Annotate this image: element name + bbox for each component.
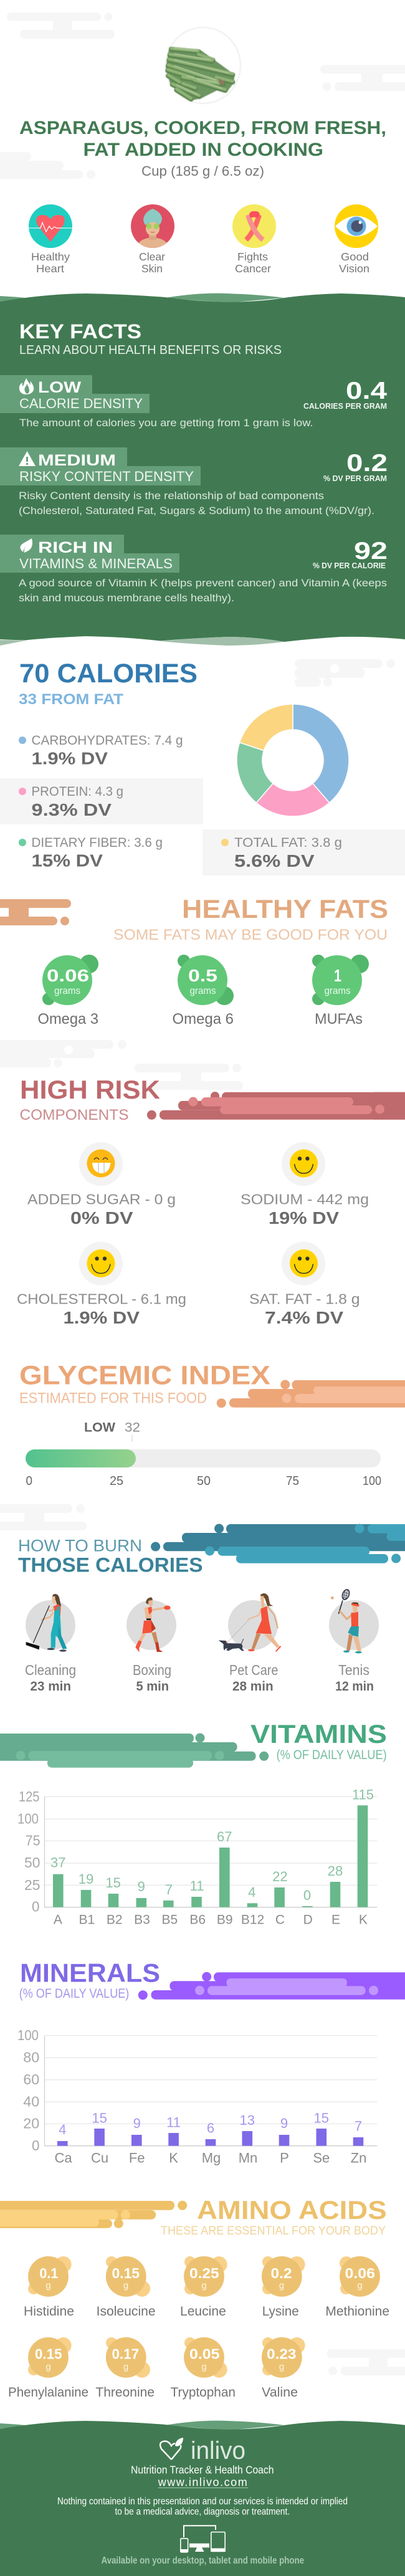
panel: amino acids [0,2195,389,2400]
amino: phenylalanine [8,2337,88,2400]
amino: leucine: 0.25 [189,2265,219,2281]
amino: lysine: Lysine [262,2304,299,2319]
legend: total fat: TOTAL FAT: 3.8 g [234,836,342,850]
amino: isoleucine: g [123,2281,128,2291]
gauge value [84,1421,140,1442]
bar chart: vitamins: B5 [162,1913,178,1927]
panel: health benefits [29,204,378,275]
bar chart: vitamins: 50 [24,1854,40,1871]
decorative blob [0,2201,187,2228]
benefit labels: Cancer [235,262,271,275]
donut chart: macronutrients [237,704,349,816]
heading: vitamins: VITAMINS [250,1719,387,1748]
decorative blob [217,1380,405,1408]
amino: phenylalanine: g [45,2362,51,2372]
decorative blob [0,899,71,925]
bar chart: vitamins: 4 [248,1884,255,1900]
bar chart: minerals: 0 [32,2137,40,2154]
bar chart: minerals: 11 [166,2114,181,2130]
subheading: ESTIMATED FOR THIS FOOD [19,1390,207,1407]
fact: medium risky content density: 0.2 [346,450,388,477]
icon: good vision eye [335,204,378,248]
item: cholesterol: 1.9% DV [64,1308,140,1327]
heading: high risk: HIGH RISK [20,1075,160,1104]
benefit labels [31,250,369,275]
bar chart: minerals: 40 [23,2093,39,2109]
item: saturated fat: SAT. FAT - 1.8 g [249,1291,360,1307]
bar chart: vitamins: 125 [19,1788,39,1805]
decorative blob [151,1524,405,1563]
panel: glycemic index [19,1361,405,1488]
fact: medium risky content density: (Cholesterol, Saturated Fat, Sugars & Sodium) to the amount (%DV/gr). [19,505,374,517]
icon: flame [19,378,34,394]
bar chart: minerals: 6 [207,2120,214,2136]
amino: histidine: g [45,2281,51,2291]
bar chart: vitamins: K [359,1913,368,1927]
panel: calories [0,659,405,875]
item: added sugar: ADDED SUGAR - 0 g [27,1191,176,1208]
stat: omega 3: 0.06 [47,966,89,985]
amino: leucine [180,2256,227,2319]
bar chart: minerals: 13 [240,2112,255,2128]
benefit labels: Heart [36,262,64,275]
item: saturated fat [249,1242,360,1327]
gauge axis [26,1474,381,1488]
fact: low calorie density: CALORIE DENSITY [19,396,143,411]
gauge axis: 75 [286,1474,299,1488]
subheading: (% OF DAILY VALUE) [19,1987,129,2001]
legend: carbohydrates: 1.9% DV [31,749,108,768]
bar chart: minerals: Se [313,2150,330,2166]
heading: glycemic index: GLYCEMIC INDEX [19,1361,270,1391]
bar chart: vitamins: 100 [17,1811,39,1827]
amino: lysine: g [279,2281,284,2291]
panel: healthy fats [0,894,388,1028]
amino: methionine: 0.06 [345,2265,375,2281]
panel: minerals [17,1958,405,2166]
icon: warning triangle [19,451,36,466]
bar chart: vitamins: B1 [79,1913,95,1927]
bar chart: minerals: Ca [55,2150,72,2166]
decorative blob [147,1092,405,1120]
subheading: SOME FATS MAY BE GOOD FOR YOU [113,927,388,943]
bar chart: minerals: 20 [23,2116,39,2132]
benefit labels: Vision [339,262,369,275]
benefit labels: Fights [237,250,268,263]
gauge value: LOW [84,1421,115,1435]
stat: omega 6: 0.5 [188,966,217,985]
bar chart: minerals [17,2027,377,2166]
website link: www.inlivo.com [158,2476,247,2488]
stat: omega 3 [37,955,98,1028]
item: sodium [241,1142,369,1228]
panel: vitamins [0,1719,387,1927]
stat: mufas: grams [324,986,350,996]
amino: leucine: Leucine [180,2304,226,2319]
item: added sugar [27,1142,176,1228]
bar chart: vitamins: 75 [26,1833,40,1849]
gauge axis: 100 [363,1474,381,1488]
bar chart: vitamins: 37 [50,1855,66,1871]
amino: tryptophan: Tryptophan [171,2385,236,2400]
bar chart: minerals: 15 [314,2111,329,2126]
fact: low calorie density: CALORIES PER GRAM [303,401,387,411]
bar chart: minerals: P [280,2150,289,2166]
bar chart: vitamins: 22 [272,1869,288,1884]
legend: protein [19,785,123,819]
stat: mufas: 1 [334,966,341,985]
bar chart: vitamins: 7 [165,1882,173,1897]
bar chart: vitamins: 19 [79,1871,93,1887]
bar chart: vitamins: E [331,1913,340,1927]
bar chart: vitamins: B12 [241,1913,264,1927]
bar chart: vitamins: 9 [138,1879,145,1894]
amino: leucine: g [201,2281,207,2291]
bar chart: vitamins: A [54,1913,62,1927]
amino: methionine [325,2256,389,2319]
activity: cleaning [25,1594,76,1694]
disclaimer [57,2496,348,2517]
serving size: Cup (185 g / 6.5 oz) [141,163,264,179]
amino: phenylalanine: Phenylalanine [8,2385,88,2400]
subheading: THESE ARE ESSENTIAL FOR YOUR BODY [161,2224,386,2238]
heading: key facts: KEY FACTS [19,320,141,343]
amino: tryptophan [171,2337,236,2400]
bar chart: vitamins: 0 [32,1899,40,1915]
legend: protein: PROTEIN: 4.3 g [31,785,123,799]
fact: medium risky content density: RISKY CONTENT DENSITY [19,469,194,484]
amino: methionine: g [357,2281,363,2291]
decorative blob [138,1972,405,2000]
subheading: (% OF DAILY VALUE) [277,1748,387,1762]
bar chart: minerals: 4 [59,2122,66,2137]
bar chart: minerals: 100 [17,2027,39,2043]
benefit labels: Healthy [31,250,70,263]
title: ASPARAGUS, COOKED, FROM FRESH, [19,118,386,138]
amino: isoleucine [97,2256,156,2319]
bar chart: minerals: K [169,2150,178,2166]
panel: footer [0,2421,405,2576]
bar chart: vitamins: 28 [328,1863,343,1879]
amino: histidine: Histidine [24,2304,74,2319]
gauge value: 32 [125,1421,140,1435]
fact: low calorie density: The amount of calories you are getting from 1 gram is low. [19,417,313,429]
heading: those calories: THOSE CALORIES [18,1554,203,1577]
amino: valine: g [279,2362,284,2372]
amino: threonine [95,2337,155,2400]
amino: valine [262,2337,305,2400]
item: cholesterol [17,1242,186,1327]
logo: inlivo [160,2437,245,2464]
amino: histidine [24,2256,74,2319]
fact: rich in vitamins and minerals: % DV PER CALORIE [313,561,386,570]
fact: low calorie density [0,375,387,429]
bar chart: minerals: Zn [351,2150,366,2166]
item: saturated fat: 7.4% DV [265,1308,343,1327]
bar chart: minerals: Cu [91,2150,108,2166]
amino: isoleucine: 0.15 [112,2265,140,2281]
legend: carbohydrates [19,733,183,768]
gauge bar [26,1449,381,1467]
bar chart: vitamins: 25 [24,1877,40,1893]
legend: protein: 9.3% DV [31,800,112,819]
panel: high risk components [17,1075,405,1327]
disclaimer: to be a medical advice, diagnosis or treatment. [115,2507,290,2517]
fact: rich in vitamins and minerals: 92 [354,538,388,565]
activity: pet care [219,1593,280,1694]
title [19,118,386,160]
legend: dietary fiber [19,836,163,871]
bar chart: vitamins: D [303,1913,313,1927]
amino: lysine [262,2256,305,2319]
fact: rich in vitamins and minerals: A good source of Vitamin K (helps prevent cancer) and Vitamin A (keeps [19,577,387,589]
bar chart: vitamins: 11 [190,1878,204,1894]
bar chart: vitamins: C [275,1913,285,1927]
activity: tennis: Tenis [338,1662,369,1678]
activity: cleaning: 23 min [30,1679,71,1694]
legend: dietary fiber: 15% DV [31,851,103,871]
stat: mufas: MUFAs [315,1011,363,1028]
amino: lysine: 0.2 [270,2265,292,2281]
gauge axis: 50 [197,1474,211,1488]
fact: rich in vitamins and minerals: RICH IN [38,539,113,556]
amino: tryptophan: 0.05 [189,2346,220,2362]
decorative blob [0,1734,269,1768]
availability note: Available on your desktop, tablet and mobile phone [101,2555,304,2566]
activity: tennis: 12 min [335,1679,374,1694]
amino: threonine: Threonine [95,2385,155,2400]
heading: amino acids: AMINO ACIDS [197,2195,387,2225]
tagline: Nutrition Tracker & Health Coach [131,2463,274,2476]
legend: carbohydrates: CARBOHYDRATES: 7.4 g [31,733,183,748]
benefit labels: Good [341,250,369,263]
bar chart: vitamins: 67 [217,1829,232,1844]
fact: rich in vitamins and minerals [0,535,388,604]
stat: omega 6: Omega 6 [172,1011,234,1028]
gauge axis: 25 [110,1474,123,1488]
bar chart: minerals: Mg [202,2150,221,2166]
subheading: LEARN ABOUT HEALTH BENEFITS OR RISKS [19,343,282,357]
amino: threonine: 0.17 [112,2346,139,2362]
subheading: from fat: 33 FROM FAT [19,691,123,708]
fact: medium risky content density [0,447,388,517]
amino: valine: Valine [262,2385,298,2400]
bar chart: vitamins: B9 [217,1913,233,1927]
bar chart: minerals: Fe [129,2150,145,2166]
heading: 70 calories: 70 CALORIES [19,659,198,689]
disclaimer: Nothing contained in this presentation and our services is intended or implied [57,2496,348,2507]
amino: threonine: g [123,2362,128,2372]
bar chart: minerals: 7 [355,2118,362,2134]
bar chart: minerals: Mn [239,2150,257,2166]
fact: rich in vitamins and minerals: VITAMINS & MINERALS [19,556,173,571]
item: sodium: 19% DV [269,1208,339,1228]
icon: fights cancer ribbon [232,204,276,248]
amino: histidine: 0.1 [39,2265,59,2281]
bar chart: minerals: 9 [133,2116,141,2131]
subheading: components: COMPONENTS [20,1107,128,1123]
fact: low calorie density: LOW [38,379,81,396]
bar chart: vitamins: 115 [352,1787,374,1803]
icon: healthy heart [29,204,72,248]
panel: key facts [0,293,405,646]
benefit labels: Clear [139,250,165,263]
bar chart: vitamins: 0 [303,1887,311,1903]
bar chart: minerals: 15 [92,2111,107,2126]
logo: inlivo: inlivo [191,2437,245,2464]
amino: phenylalanine: 0.15 [35,2346,62,2362]
stat: omega 6: grams [189,986,216,996]
activity: pet care: 28 min [232,1679,274,1694]
activity: pet care: Pet Care [229,1662,278,1678]
title: FAT ADDED IN COOKING [83,140,323,160]
activity: cleaning: Cleaning [25,1662,76,1678]
activity: boxing: 5 min [136,1679,169,1694]
stat: omega 3: grams [54,986,80,996]
gauge axis: 0 [26,1474,32,1488]
amino: isoleucine: Isoleucine [97,2304,156,2319]
item: cholesterol: CHOLESTEROL - 6.1 mg [17,1291,186,1307]
item: added sugar: 0% DV [70,1208,133,1228]
stat: mufas [312,955,369,1028]
food photo: asparagus [166,27,241,103]
bar chart: vitamins: 15 [105,1875,121,1891]
legend: total fat: 5.6% DV [234,851,315,871]
bar chart: minerals: 60 [23,2071,39,2087]
bar chart: minerals: 9 [280,2116,288,2131]
item: sodium: SODIUM - 442 mg [241,1191,369,1208]
bar chart: minerals: 80 [23,2049,39,2065]
amino: methionine: Methionine [325,2304,389,2319]
activity: tennis [329,1588,379,1694]
heading: minerals: MINERALS [20,1958,160,1988]
stat: omega 6 [172,955,234,1028]
panel: how to burn calories [18,1524,405,1694]
legend: dietary fiber: DIETARY FIBER: 3.6 g [31,836,163,850]
bar chart: vitamins: B3 [134,1913,150,1927]
heading: how to burn: HOW TO BURN [18,1536,142,1555]
amino: valine: 0.23 [267,2346,297,2362]
bar chart: vitamins: B6 [189,1913,206,1927]
fact: low calorie density: 0.4 [346,378,387,404]
bar chart: vitamins [17,1787,377,1927]
legend: total fat [221,836,342,871]
icon: devices [180,2526,226,2552]
bar chart: vitamins: B2 [107,1913,123,1927]
fact: medium risky content density: Risky Content density is the relationship of bad components [19,490,324,502]
stat: omega 3: Omega 3 [37,1011,98,1028]
heading: healthy fats: HEALTHY FATS [182,894,388,923]
benefit labels: Skin [141,262,163,275]
amino: tryptophan: g [201,2362,207,2372]
fact: medium risky content density: MEDIUM [38,452,116,469]
icon: leaf [20,538,32,553]
fact: medium risky content density: % DV PER GRAM [323,474,387,483]
icon: clear skin [131,204,174,249]
activity: boxing: Boxing [133,1662,171,1678]
activity: boxing [126,1597,176,1694]
fact: rich in vitamins and minerals: skin and mucous membrane cells healthy). [19,592,234,604]
